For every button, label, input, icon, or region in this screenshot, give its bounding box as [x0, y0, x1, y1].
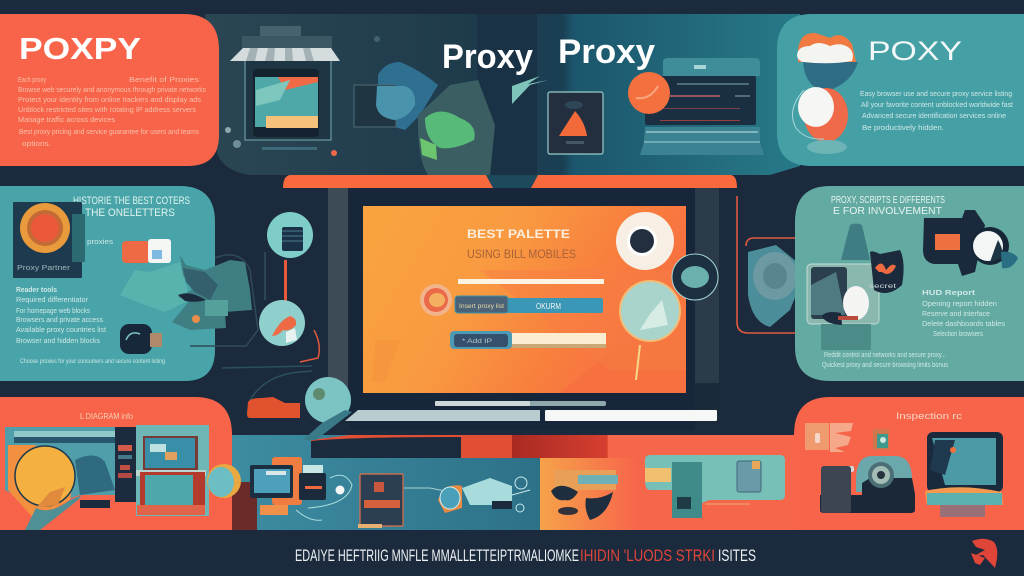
icon: eye lens: [616, 212, 674, 270]
icon: proxy book: [13, 202, 85, 278]
panel: middle left: [0, 186, 215, 381]
panel: top centre illustration: [205, 14, 800, 176]
text block: Choose proxies for your consumers and secure content listing: [20, 359, 165, 365]
input bar: * Add IP: [462, 338, 492, 345]
monitors stack: [136, 425, 209, 516]
icon: key: [512, 477, 530, 512]
search bar: Insert proxy list: [459, 303, 504, 310]
text block: Advanced secure identification services online: [862, 113, 1006, 120]
text block: HUD Report: [922, 290, 976, 297]
icon: black camera: [923, 210, 1018, 276]
text block: Protect your identity from online trackers and display ads: [18, 97, 202, 104]
text block: Best proxy pricing and service guarantee for users and teams: [19, 129, 199, 136]
icon: teal shard: [512, 76, 548, 104]
icon: small tile: [873, 429, 889, 450]
text block: options.: [22, 141, 51, 148]
panel: top right: [777, 14, 1024, 166]
icon: camera: [820, 456, 915, 513]
text block: Opening report hidden: [922, 301, 997, 308]
icon: circle with fish: [259, 300, 305, 346]
text block: [18, 77, 206, 148]
cables and connector circles: [190, 212, 319, 400]
icon: device card: secret: [869, 283, 896, 290]
icon: proxy book: Proxy Partner: [17, 265, 71, 272]
teal device card: [645, 455, 785, 518]
heading: HISTORIE THE BEST COTERS: [73, 195, 190, 207]
icon: small lens: [420, 284, 452, 316]
icon: document: [805, 423, 853, 452]
text block: Reddit control and networks and secure proxy...: [824, 352, 946, 359]
icon: dark key: [120, 324, 162, 354]
text block: Easy browser use and secure proxy service listing: [860, 91, 1012, 98]
text block: Available proxy countries list: [16, 327, 106, 334]
icon: orange and white circle: [792, 87, 848, 154]
panel: top left: [0, 14, 219, 166]
icon: display: [925, 432, 1003, 517]
icon: laptop: [628, 58, 764, 155]
bottom left window illustration: [5, 412, 241, 530]
icon: storefront: [225, 26, 380, 156]
label: proxies: [87, 239, 114, 246]
icon: cloud: [797, 33, 858, 90]
footer text: EDAIYE HEFTRIIG MNFLE MMALLETTEIPTRMALIOMKE: [295, 546, 579, 565]
text block: Browse web securely and anonymous through private networks: [18, 87, 206, 94]
heading: THE ONELETTERS: [85, 207, 175, 219]
title: Proxy right: Proxy: [558, 33, 655, 71]
heading: POXPY: POXPY: [19, 31, 141, 66]
text block: Delete dashboards tables: [922, 321, 1006, 328]
connector line: [284, 260, 287, 302]
icon: red car and round connector: [247, 377, 352, 440]
screen subheading: USING BILL MOBILES: [467, 247, 576, 261]
text block: [822, 290, 1006, 369]
text block: Browsers and private access: [16, 317, 103, 324]
text block: Manage traffic across devices: [18, 117, 116, 124]
text block: For homepage web blocks: [16, 308, 90, 315]
text block: Benefit of Proxies: [129, 77, 200, 84]
text block: Be productively hidden.: [862, 125, 944, 132]
text block: Quickest proxy and secure browsing limits bonus: [822, 362, 948, 369]
heading: POXY: POXY: [868, 36, 962, 66]
input bar: [450, 331, 606, 349]
text block: All your favorite content unblocked worldwide fast: [861, 102, 1013, 109]
text block: Required differentiator: [16, 297, 89, 304]
monitor: [328, 188, 720, 430]
text block: Each proxy: [18, 77, 46, 84]
footer text: ISITES: [718, 546, 756, 565]
text block: Reader tools: [16, 287, 57, 294]
text block: [860, 91, 1013, 132]
text block: Browser and hidden blocks: [16, 338, 100, 345]
text block: Reserve and interface: [922, 311, 990, 318]
text block: Unblock restricted sites with rotating IP address servers: [18, 107, 197, 114]
heading: E FOR INVOLVEMENT: [833, 205, 943, 217]
red strip under monitor: [311, 435, 608, 458]
label: Inspection rc: [896, 411, 963, 421]
search bar: [455, 296, 603, 313]
text block: Selection browsers: [933, 331, 983, 338]
search bar: OKURM: [536, 302, 561, 311]
teal yellow blob: [207, 464, 241, 498]
title: Proxy left: Proxy: [442, 38, 533, 76]
heading: [831, 194, 945, 217]
heading: [73, 195, 190, 219]
icon: connector frame with lens: [737, 196, 800, 333]
text block: [16, 287, 165, 365]
screen heading: BEST PALETTE: [467, 227, 570, 241]
icon: device card: [807, 224, 904, 350]
icon: footer logo: [971, 539, 997, 568]
panel: middle right: [737, 186, 1024, 381]
icon: circle with server: [267, 212, 313, 258]
icon: globe with monitor: [354, 62, 495, 175]
icon: dark lens: [672, 254, 718, 300]
bottom centre orange items: [551, 470, 618, 520]
icon: data card: [120, 239, 190, 312]
icon: magnifier: [620, 281, 680, 380]
icon: tablet: [548, 92, 603, 154]
icon: fish gadget: [438, 478, 512, 513]
monitor base: [345, 401, 717, 421]
screen: [363, 206, 686, 393]
bottom centre gadgets: [250, 457, 530, 528]
heading: PROXY, SCRIPTS E DIFFERENTS: [831, 194, 945, 206]
footer text: IHIDIN 'LUODS STRKI: [580, 546, 715, 565]
panel: bottom band: [0, 397, 1024, 530]
white bar: [458, 279, 604, 284]
icon: sitting cat figure: [172, 255, 252, 330]
label: L DIAGRAM info: [80, 412, 133, 421]
orange connector bars: [283, 175, 737, 188]
panel: bottom right camera: [805, 411, 1003, 517]
